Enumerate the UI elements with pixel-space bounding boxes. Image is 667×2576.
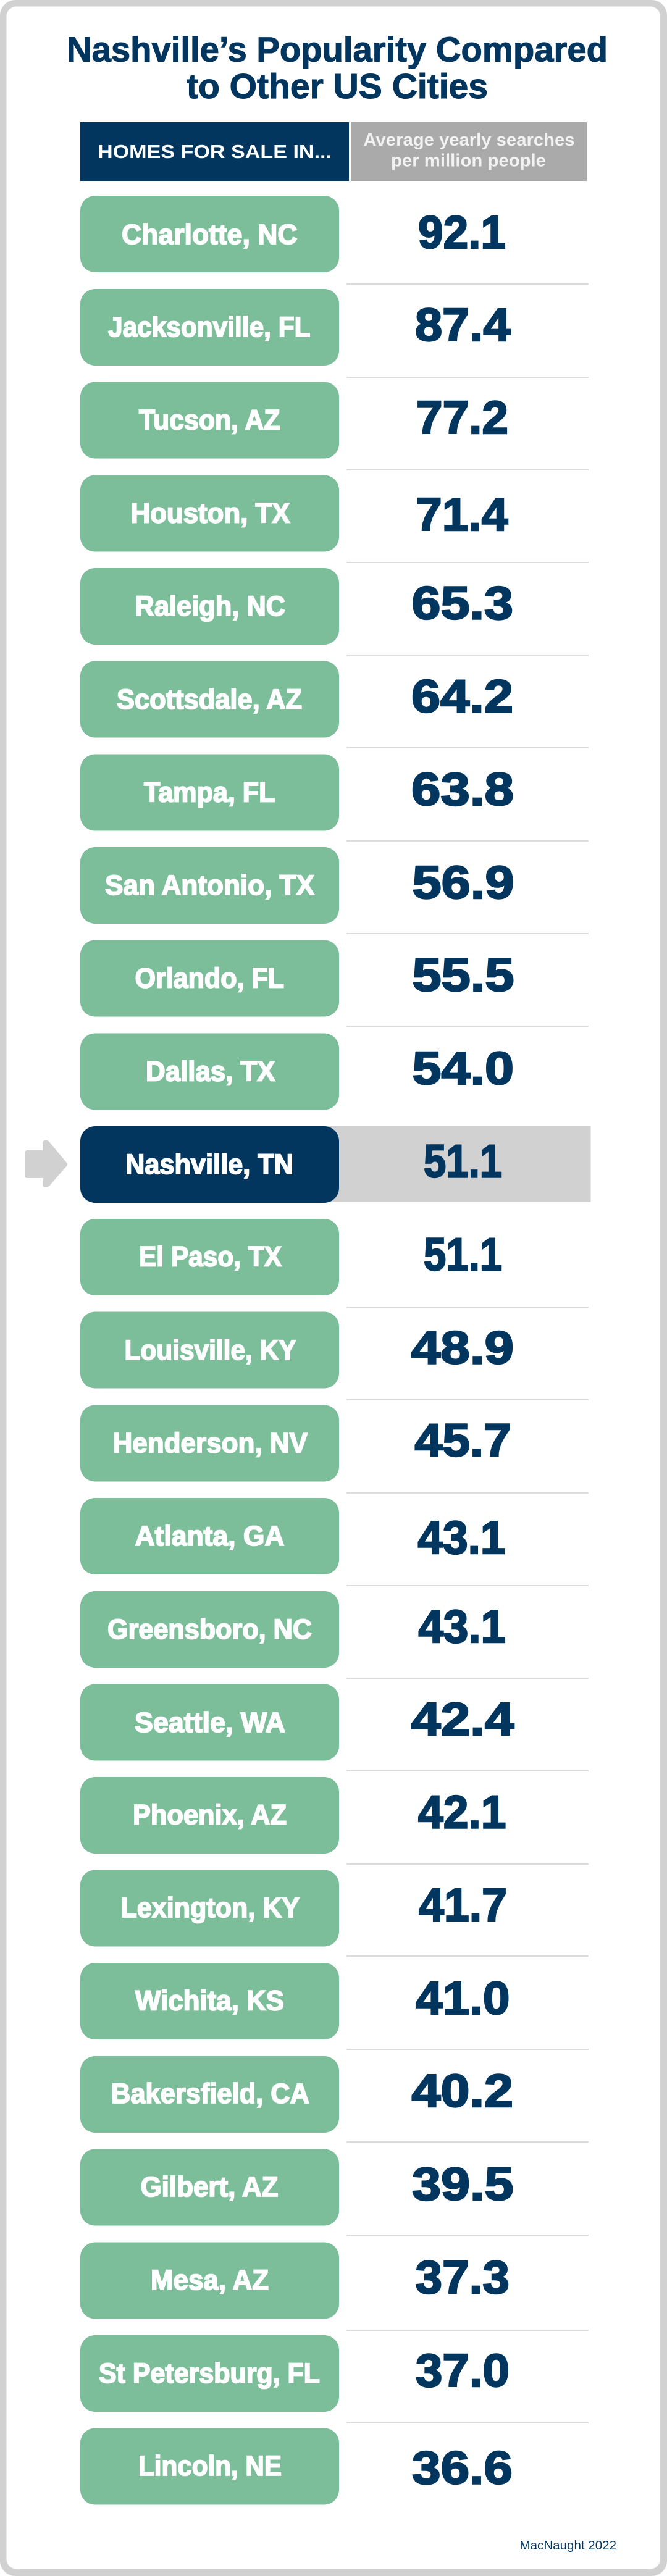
row: Atlanta: Atlanta, GA bbox=[135, 1520, 284, 1552]
row: Mesa: Mesa, AZ bbox=[151, 2264, 269, 2296]
row: St Petersburg bbox=[80, 2335, 510, 2412]
header: average yearly searches: per million people bbox=[391, 151, 546, 170]
row: Gilbert: 39.5 bbox=[412, 2158, 514, 2210]
row: Henderson: 45.7 bbox=[415, 1414, 511, 1466]
row: Wichita: Wichita, KS bbox=[135, 1985, 284, 2017]
row: Houston: 71.4 bbox=[416, 488, 508, 540]
row: Greensboro: 43.1 bbox=[419, 1600, 506, 1652]
row: San Antonio: San Antonio, TX bbox=[105, 869, 314, 901]
row: Atlanta: 43.1 bbox=[417, 1512, 505, 1563]
row: Lincoln bbox=[80, 2428, 513, 2504]
row: Raleigh bbox=[80, 568, 513, 645]
row: Jacksonville: 87.4 bbox=[415, 299, 511, 351]
row: Lincoln: 36.6 bbox=[412, 2442, 513, 2494]
row: Tucson: 77.2 bbox=[416, 391, 508, 443]
row: Louisville: Louisville, KY bbox=[125, 1334, 296, 1366]
row: Henderson bbox=[80, 1405, 511, 1482]
row: St Petersburg: St Petersburg, FL bbox=[99, 2357, 320, 2389]
row: Charlotte: Charlotte, NC bbox=[122, 219, 298, 250]
row: Louisville bbox=[80, 1311, 514, 1388]
row: Orlando: 55.5 bbox=[413, 949, 514, 1001]
row: Gilbert: Gilbert, AZ bbox=[141, 2171, 278, 2202]
row: Tampa bbox=[80, 755, 514, 831]
row: El Paso bbox=[80, 1219, 502, 1295]
row: Mesa bbox=[80, 2243, 510, 2319]
row: Gilbert bbox=[80, 2149, 514, 2225]
row: Mesa: 37.3 bbox=[415, 2251, 510, 2303]
row: Jacksonville: Jacksonville, FL bbox=[108, 311, 310, 343]
row: Scottsdale: 64.2 bbox=[411, 671, 513, 722]
row: Dallas: Dallas, TX bbox=[146, 1056, 275, 1087]
header: homes for sale bbox=[80, 122, 349, 181]
row: Dallas bbox=[80, 1034, 514, 1110]
title: Nashville’s Popularity Compared bbox=[67, 30, 608, 69]
row: Raleigh: 65.3 bbox=[411, 577, 513, 629]
row: Seattle bbox=[80, 1684, 514, 1761]
credit: MacNaught 2022 bbox=[520, 2539, 616, 2553]
row: Tucson: Tucson, AZ bbox=[139, 404, 280, 436]
row: Scottsdale bbox=[80, 661, 513, 737]
row: Tampa: Tampa, FL bbox=[144, 777, 275, 808]
title: to Other US Cities bbox=[187, 67, 488, 106]
row: Jacksonville bbox=[80, 289, 511, 366]
icon: arrow pointing to Nashville bbox=[27, 1143, 65, 1185]
row: Nashville highlight: Nashville, TN bbox=[125, 1148, 293, 1180]
row: Lexington: Lexington, KY bbox=[121, 1892, 300, 1923]
row: Lexington bbox=[80, 1870, 507, 1946]
row: St Petersburg: 37.0 bbox=[416, 2344, 510, 2396]
row: Wichita bbox=[80, 1963, 510, 2039]
row: San Antonio: 56.9 bbox=[413, 856, 514, 908]
row: Dallas: 54.0 bbox=[413, 1042, 514, 1094]
row: Charlotte: 92.1 bbox=[418, 206, 506, 258]
title bbox=[67, 30, 608, 106]
row: Charlotte bbox=[80, 196, 506, 272]
row: Greensboro: Greensboro, NC bbox=[107, 1613, 312, 1645]
row: Wichita: 41.0 bbox=[416, 1972, 510, 2024]
row: El Paso: El Paso, TX bbox=[139, 1241, 282, 1273]
row: Nashville highlight bbox=[80, 1126, 590, 1203]
table header bbox=[80, 122, 587, 181]
row: Houston: Houston, TX bbox=[131, 498, 290, 529]
row: Bakersfield: 40.2 bbox=[411, 2065, 513, 2117]
row: Bakersfield: Bakersfield, CA bbox=[111, 2078, 309, 2109]
row: Atlanta bbox=[80, 1498, 505, 1574]
row: Houston bbox=[80, 475, 508, 552]
header: average yearly searches: Average yearly searches bbox=[363, 130, 574, 150]
row: Seattle: Seattle, WA bbox=[135, 1707, 285, 1738]
row: Phoenix bbox=[80, 1777, 506, 1854]
row: Bakersfield bbox=[80, 2056, 513, 2133]
row: Greensboro bbox=[80, 1591, 506, 1668]
row: Orlando: Orlando, FL bbox=[135, 962, 284, 994]
row: Scottsdale: Scottsdale, AZ bbox=[117, 684, 302, 715]
row: Henderson: Henderson, NV bbox=[112, 1428, 308, 1458]
row: El Paso: 51.1 bbox=[424, 1229, 502, 1281]
header: average yearly searches bbox=[351, 122, 587, 181]
row: San Antonio bbox=[80, 847, 514, 924]
header: homes for sale: HOMES FOR SALE IN... bbox=[98, 141, 332, 162]
row: Nashville highlight: 51.1 bbox=[424, 1135, 502, 1187]
row: Louisville: 48.9 bbox=[411, 1321, 514, 1373]
row: Phoenix: Phoenix, AZ bbox=[133, 1799, 287, 1831]
row: Lexington: 41.7 bbox=[419, 1879, 507, 1931]
row: Lincoln: Lincoln, NE bbox=[138, 2450, 282, 2482]
row: Tampa: 63.8 bbox=[411, 763, 514, 815]
row: Phoenix: 42.1 bbox=[418, 1786, 506, 1838]
row: Seattle: 42.4 bbox=[411, 1693, 514, 1745]
row: Orlando bbox=[80, 940, 514, 1016]
row: Tucson bbox=[80, 382, 508, 458]
row: Raleigh: Raleigh, NC bbox=[135, 590, 285, 622]
